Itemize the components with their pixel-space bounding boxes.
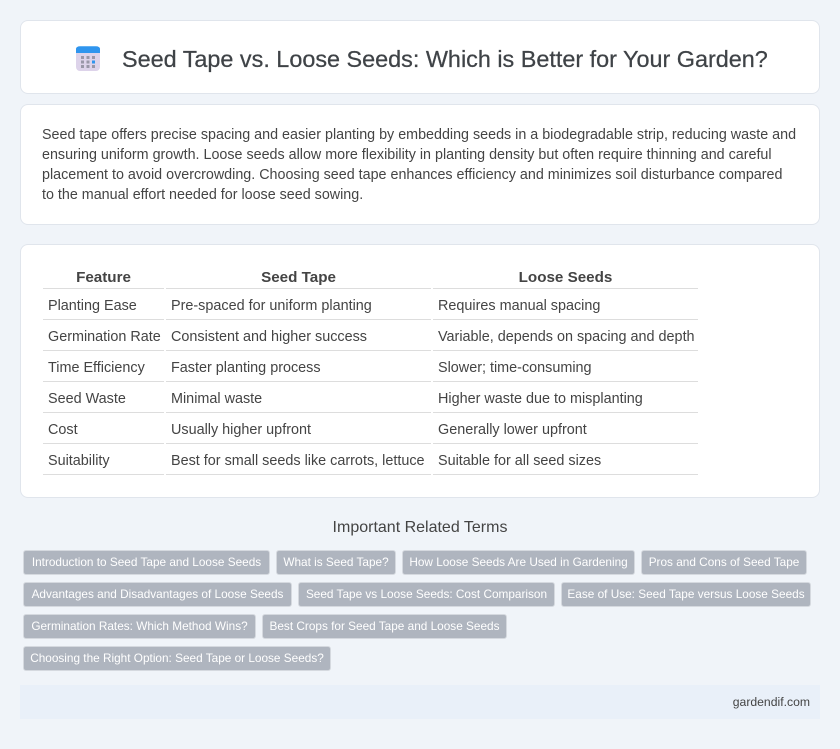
- intro text panel: [20, 104, 820, 225]
- comparison table: Generally lower upfront: [438, 422, 587, 438]
- comparison table: Minimal waste: [171, 391, 262, 407]
- comparison table: Variable, depends on spacing and depth: [438, 329, 695, 345]
- related terms tags: Advantages and Disadvantages of Loose Seeds: [32, 587, 283, 601]
- related terms tags: Ease of Use: Seed Tape versus Loose Seeds: [567, 587, 805, 601]
- related terms tags: Choosing the Right Option: Seed Tape or Loose Seeds?: [30, 651, 324, 665]
- comparison table: Best for small seeds like carrots, lettuce: [171, 453, 425, 469]
- comparison table: Seed Waste: [48, 391, 126, 407]
- comparison table: Usually higher upfront: [171, 422, 311, 438]
- comparison table: Consistent and higher success: [171, 329, 367, 345]
- comparison table: Cost: [48, 422, 78, 438]
- comparison table: Suitable for all seed sizes: [438, 453, 601, 469]
- related terms heading: Important Related Terms: [333, 519, 507, 536]
- footer site name: gardendif.com: [733, 695, 810, 709]
- related terms tags: How Loose Seeds Are Used in Gardening: [409, 555, 628, 569]
- comparison table: Loose Seeds: [519, 269, 612, 286]
- icon: calendar: [76, 46, 100, 71]
- header panel: [20, 20, 820, 94]
- comparison table panel: [20, 244, 820, 498]
- comparison table: Pre-spaced for uniform planting: [171, 298, 372, 314]
- related terms tags: Germination Rates: Which Method Wins?: [31, 619, 248, 633]
- footer bar: [20, 685, 820, 719]
- comparison table: Time Efficiency: [48, 360, 145, 376]
- intro paragraph: Seed tape offers precise spacing and easier planting by embedding seeds in a biodegradable strip, reducing waste and: [42, 127, 796, 143]
- intro paragraph: placement to avoid overcrowding. Choosing seed tape enhances efficiency and minimizes soil disturbance compared: [42, 167, 782, 183]
- intro paragraph: [42, 127, 796, 203]
- related terms tags: Seed Tape vs Loose Seeds: Cost Comparison: [306, 587, 547, 601]
- related terms tags: Introduction to Seed Tape and Loose Seeds: [32, 555, 261, 569]
- comparison table: Seed Tape: [261, 269, 336, 286]
- comparison table: Feature: [76, 269, 131, 286]
- comparison table: Slower; time-consuming: [438, 360, 592, 376]
- related terms tags: What is Seed Tape?: [283, 555, 389, 569]
- intro paragraph: ensuring uniform growth. Loose seeds allow more flexibility in planting density but often require thinning and careful: [42, 147, 772, 163]
- comparison table: Requires manual spacing: [438, 298, 600, 314]
- comparison table: Suitability: [48, 453, 110, 469]
- comparison table: Planting Ease: [48, 298, 137, 314]
- related terms tags: Pros and Cons of Seed Tape: [649, 555, 799, 569]
- comparison table: Germination Rate: [48, 329, 161, 345]
- title: Seed Tape vs. Loose Seeds: Which is Better for Your Garden?: [122, 46, 768, 72]
- comparison table: Faster planting process: [171, 360, 321, 376]
- related terms tags: [23, 550, 811, 671]
- related terms tags: Best Crops for Seed Tape and Loose Seeds: [270, 619, 499, 633]
- intro paragraph: to the manual effort needed for loose seed sowing.: [42, 187, 363, 203]
- comparison table: Higher waste due to misplanting: [438, 391, 643, 407]
- comparison table: [43, 269, 698, 475]
